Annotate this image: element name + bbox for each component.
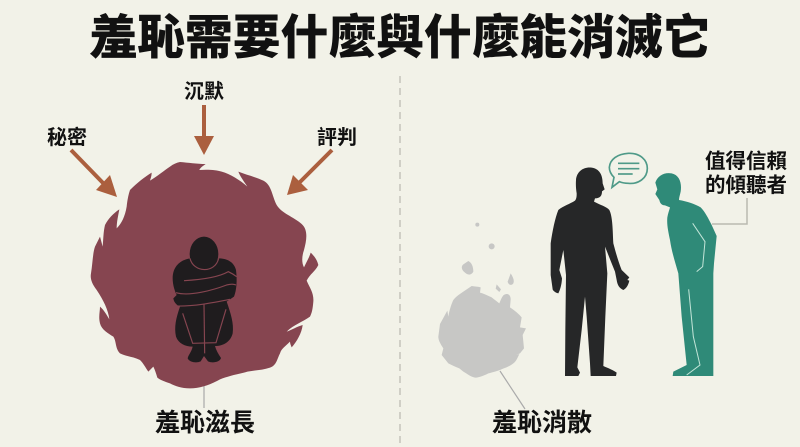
title: 羞恥需要什麼與什麼能消滅它 [89,12,711,65]
arrow: secret [71,150,117,197]
label: shame grows: 羞恥滋長 [155,409,255,437]
label: trusted listener [705,150,787,197]
teal listening person [655,173,717,376]
dark standing person [551,168,629,376]
label: trusted listener: 值得信賴 [705,150,787,173]
shame blob [91,162,318,388]
arrow: silence [194,105,214,155]
label: judgement: 評判 [317,127,357,149]
label: shame fades: 羞恥消散 [492,409,592,437]
huddled person icon [173,237,237,362]
label: silence: 沉默 [184,81,224,103]
label: secret: 秘密 [47,127,87,149]
leader line: shame grows [203,385,205,408]
dispersing gray blob [438,223,526,378]
arrow: judgement [287,150,332,195]
label: trusted listener: 的傾聽者 [705,174,787,197]
leader line: listener [712,198,747,224]
leader line: shame fades [500,371,525,409]
speech bubble icon [609,153,647,187]
